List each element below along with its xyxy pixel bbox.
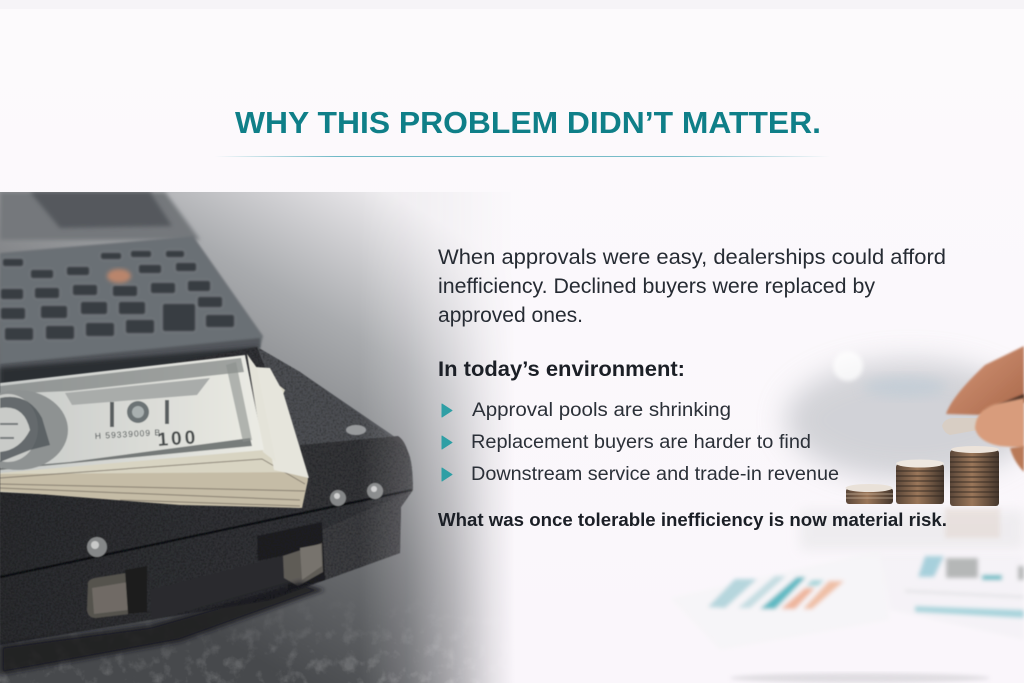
- top band: [0, 0, 1024, 9]
- bullet text 3: Downstream service and trade-in revenue: [471, 464, 839, 485]
- intro paragraph: approved ones.: [438, 304, 583, 327]
- title: WHY THIS PROBLEM DIDN’T MATTER.: [235, 105, 821, 140]
- briefcase studs: [87, 425, 383, 557]
- banknote denomination: 100: [157, 427, 199, 451]
- chart sheets: [670, 550, 1024, 650]
- calculator keys: [0, 250, 235, 341]
- intro paragraph: When approvals were easy, dealerships could afford: [438, 246, 946, 269]
- banknote engraving: [0, 358, 252, 470]
- bullet text 1: Approval pools are shrinking: [472, 400, 731, 421]
- cash stack: [0, 354, 309, 508]
- blurred paper shadow: [730, 673, 990, 683]
- briefcase: [0, 340, 420, 675]
- photo: cash on briefcase with calculator: [0, 192, 560, 683]
- orange key: [107, 269, 131, 283]
- title underline: [215, 156, 830, 157]
- coin stack small: [846, 484, 893, 504]
- photo: coin stacks and charts: [670, 346, 1024, 683]
- side chart: [905, 556, 1024, 618]
- coin stack medium: [896, 460, 944, 504]
- closing statement: What was once tolerable inefficiency is now material risk.: [438, 509, 947, 530]
- bullet text 2: Replacement buyers are harder to find: [471, 432, 811, 453]
- briefcase handle: [0, 522, 325, 675]
- bullet arrow 2: [442, 436, 452, 449]
- hand holding coin: [942, 346, 1024, 472]
- bullet list: [442, 400, 839, 485]
- table surface: [0, 192, 560, 683]
- coin stack tall: [950, 446, 999, 506]
- subheading: In today’s environment:: [438, 358, 685, 381]
- calculator: [0, 192, 263, 398]
- blurred background: [785, 351, 1024, 550]
- banknote serial: H 59339009 B: [95, 427, 161, 441]
- bullet arrow 1: [442, 404, 452, 417]
- bullet arrow 3: [442, 468, 452, 481]
- intro paragraph: [438, 246, 946, 327]
- bar chart: [708, 576, 844, 609]
- intro paragraph: inefficiency. Declined buyers were replaced by: [438, 275, 876, 298]
